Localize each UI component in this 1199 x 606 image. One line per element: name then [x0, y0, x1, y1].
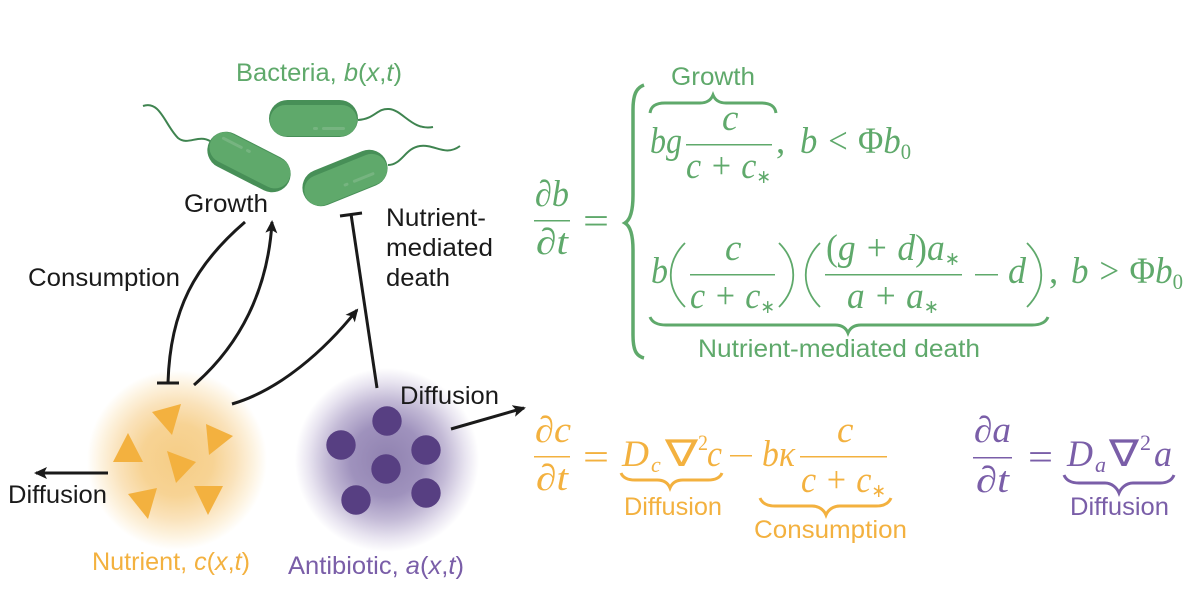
equation: nutrient: ∇ — [664, 434, 698, 475]
equation: bacteria: (g + d)a — [826, 228, 945, 269]
equation: nutrient: ∗ — [871, 481, 886, 502]
equation: nutrient — [534, 410, 907, 544]
equation: nutrient: c — [837, 410, 854, 451]
label: nutrient-mediated death — [386, 204, 493, 292]
label: bacteria: Bacteria, b(x,t) — [236, 59, 402, 87]
equation: bacteria: 0 — [1173, 269, 1183, 294]
equation: bacteria: ∗ — [760, 297, 775, 318]
equation: antibiotic: a — [1154, 434, 1172, 475]
arrow: consumption inhibition — [157, 222, 245, 383]
equation: nutrient: bκ — [762, 434, 796, 475]
equation: bacteria: b < Φb — [800, 121, 902, 162]
equation: antibiotic: = — [1028, 437, 1053, 478]
icon: antibiotic cloud — [295, 368, 479, 552]
equation: antibiotic: 2 — [1140, 430, 1151, 455]
equation: antibiotic: D — [1066, 434, 1093, 475]
equation: bacteria: c — [725, 228, 742, 269]
equation: nutrient: Consumption — [754, 516, 907, 544]
arrow: antibiotic inhibition — [340, 213, 377, 388]
icon: nutrient cloud — [87, 370, 267, 550]
arrow: nutrient diffusion — [36, 472, 108, 474]
equation: antibiotic: ∂a — [974, 410, 1011, 451]
label: right diffusion: Diffusion — [400, 382, 499, 410]
equation: bacteria: = — [583, 201, 609, 242]
equation: nutrient: D — [621, 434, 649, 475]
equation: bacteria: ∗ — [924, 297, 939, 318]
arrow: nutrient to death — [232, 310, 357, 404]
label: consumption: Consumption — [28, 264, 180, 292]
label: nutrient-mediated death: Nutrient- — [386, 204, 486, 232]
equation: bacteria: , — [1049, 251, 1058, 292]
equation: antibiotic: a — [1095, 452, 1106, 477]
equation: nutrient: Diffusion — [624, 493, 722, 521]
equation: bacteria: ∂b — [535, 174, 569, 215]
equation: bacteria: ∂t — [536, 222, 570, 263]
equation: bacteria: b > Φb — [1071, 251, 1174, 292]
equation: antibiotic — [973, 410, 1174, 521]
equation: nutrient: 2 — [698, 430, 708, 455]
equation: nutrient: ∂c — [535, 410, 572, 451]
equation: bacteria: d — [1008, 251, 1026, 292]
arrow: antibiotic diffusion — [451, 408, 524, 429]
label: nutrient: Nutrient, c(x,t) — [92, 548, 250, 576]
equation: nutrient: c — [651, 452, 661, 477]
equation: bacteria: bg — [650, 121, 682, 162]
equation: bacteria: ∗ — [945, 249, 960, 270]
label: nutrient-mediated death: mediated — [386, 234, 493, 262]
equation: bacteria — [534, 63, 1183, 363]
icon: bacteria group — [143, 100, 460, 212]
equation: bacteria: c + c — [690, 276, 766, 317]
equation: nutrient: c — [707, 434, 723, 475]
equation: bacteria: Growth — [671, 63, 755, 91]
label: left diffusion: Diffusion — [8, 481, 107, 509]
equation: bacteria: , — [776, 121, 785, 162]
equation: antibiotic: Diffusion — [1070, 493, 1169, 521]
equation: antibiotic: ∂t — [976, 460, 1011, 501]
equation: bacteria: ∗ — [756, 167, 771, 188]
equation: bacteria: 0 — [901, 139, 911, 164]
label: nutrient-mediated death: death — [386, 264, 450, 292]
equation: nutrient: ∂t — [536, 458, 570, 499]
equation: bacteria: a + a — [847, 276, 927, 317]
equation: bacteria: c — [722, 98, 739, 139]
label: antibiotic: Antibiotic, a(x,t) — [288, 552, 464, 580]
arrow: growth — [194, 222, 272, 385]
equation: nutrient: = — [583, 437, 609, 478]
equation: bacteria: c + c — [686, 146, 762, 187]
equation: nutrient: c + c — [801, 460, 877, 501]
label: growth: Growth — [184, 190, 268, 218]
equation: bacteria: Nutrient-mediated death — [698, 335, 980, 363]
equation: antibiotic: ∇ — [1108, 434, 1139, 475]
equation: bacteria: b — [651, 251, 668, 292]
